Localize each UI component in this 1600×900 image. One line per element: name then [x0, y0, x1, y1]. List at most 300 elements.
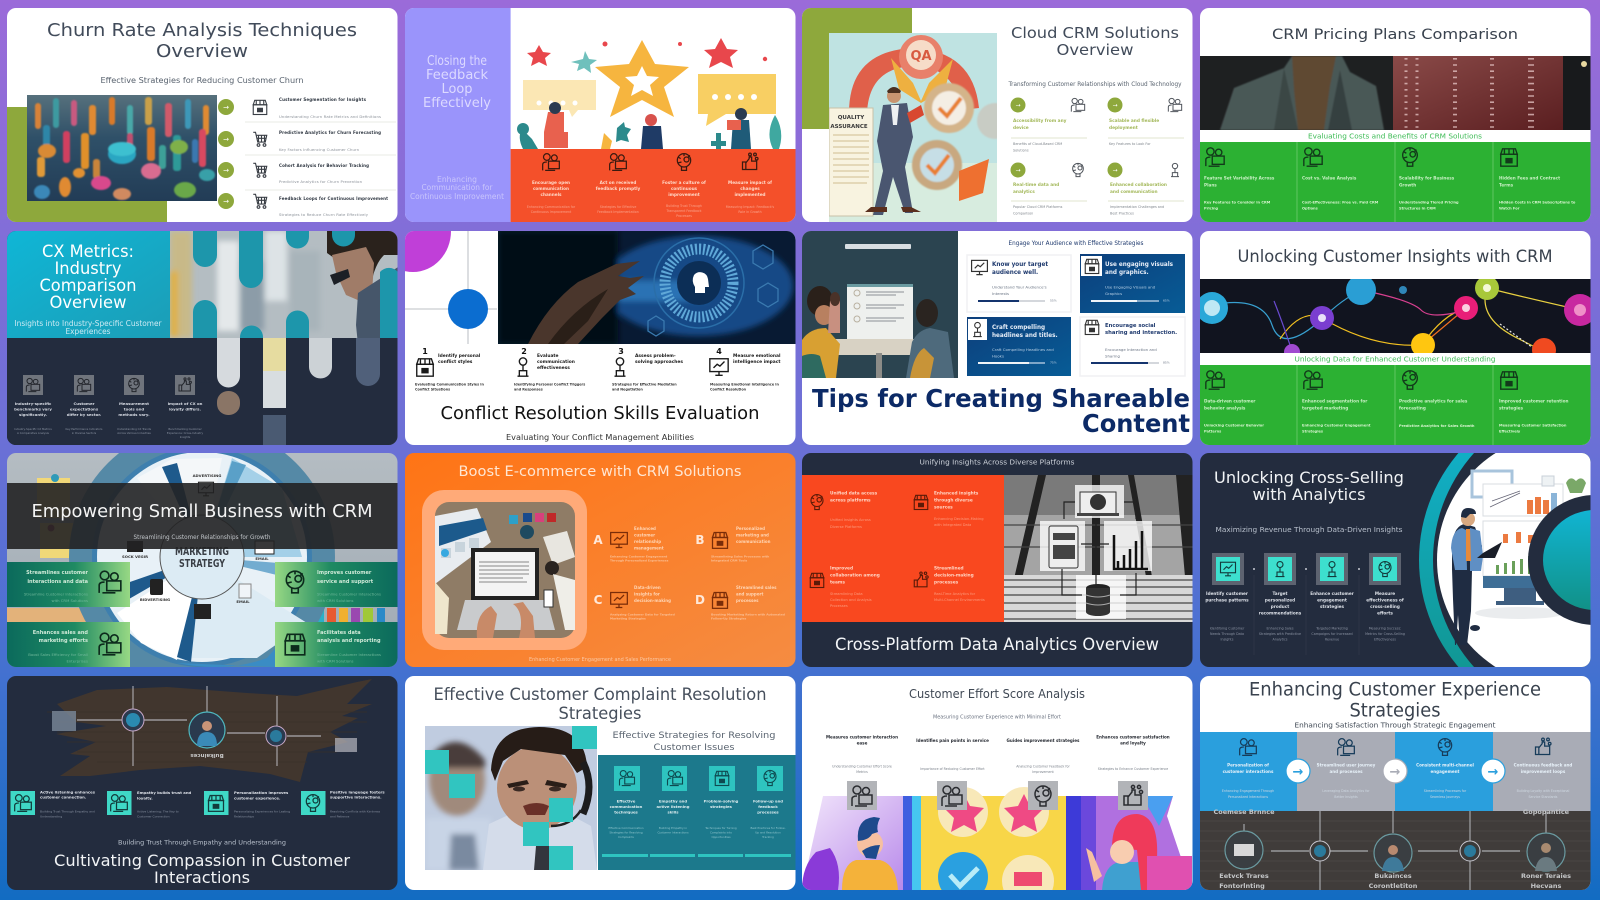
illustration: characters and stars — [802, 787, 1192, 900]
four insight items: across platforms — [830, 498, 871, 504]
title: Enhancing Customer Experience — [1249, 680, 1541, 700]
panel heading: Customer Issues — [654, 743, 735, 753]
card: Unlocking Customer Insights — [1196, 231, 1596, 445]
card: Cross-Platform Data Analytics — [802, 453, 1193, 667]
title: Effective Customer Complaint Resolution — [434, 685, 766, 705]
green accent block — [7, 107, 167, 222]
four action columns — [527, 153, 775, 218]
four insight items: sources — [934, 504, 953, 510]
card: Conflict Resolution — [405, 231, 796, 445]
four evaluation steps: 1 — [422, 347, 428, 356]
metric columns: in Diverse Sectors — [72, 431, 97, 435]
title: Strategies — [1350, 700, 1440, 722]
four insight items: through diverse — [934, 498, 973, 504]
four compassion items: Relationships — [234, 814, 254, 818]
benefit tile: top right: service and support — [317, 579, 374, 585]
title: Overview — [50, 293, 127, 313]
four evaluation steps: communication — [537, 359, 575, 365]
teal strategies panel: Best Practices for Follow- — [750, 826, 786, 830]
four insight items: processes — [934, 580, 959, 586]
marketing strategy wheel: EMAIL — [255, 556, 269, 561]
service items A to D: B — [695, 533, 705, 547]
metric columns: Understanding CX Trends — [117, 427, 152, 431]
metric columns: Industry-specific — [15, 401, 52, 406]
teal strategies panel: techniques — [614, 810, 639, 814]
benefit tile: top left: Streamlines customer — [26, 570, 89, 576]
title: Interactions — [154, 868, 250, 887]
four action columns: product — [1271, 604, 1289, 609]
photo: network of people: Eetvck Trares — [1219, 872, 1269, 880]
four evaluation steps: Identifying Personal Conflict Triggers — [514, 382, 585, 386]
card: Cultivating Compassion — [7, 676, 398, 890]
photo: coloured data pegs — [27, 95, 217, 201]
four step band: → — [1488, 765, 1499, 780]
metric columns: Benchmarking Customer — [168, 427, 203, 431]
service items A to D: communication — [736, 539, 771, 544]
four benefit items: Enhanced collaboration — [1110, 182, 1167, 188]
four insight items: decision-making — [934, 572, 974, 578]
four insight items: Unified Insights Across — [830, 518, 871, 522]
title: Content — [1082, 409, 1190, 438]
teal strategies panel — [598, 755, 796, 870]
four step band: Better Insights — [1334, 795, 1358, 799]
green column band: Feature Set Variability Across — [1204, 176, 1275, 180]
card: Effective Complaint Resolution — [405, 676, 796, 890]
title: Cross-Platform Data Analytics Overview — [835, 635, 1159, 654]
four insight items: Processes — [830, 604, 848, 608]
photo: hand and digital head — [498, 231, 796, 344]
side title: Effectively — [423, 95, 491, 111]
orange panel — [802, 475, 1004, 622]
metric columns: differ by sector. — [67, 412, 102, 417]
tip cards: Craft Compelling Headlines and — [992, 347, 1054, 352]
metric columns: Insights — [180, 435, 191, 439]
tip cards: Graphics — [1105, 291, 1122, 296]
four benefit items: Key Features to Look For — [1109, 142, 1151, 146]
four insight items: Streamlining Data — [830, 592, 863, 596]
green column band: Growth — [1399, 182, 1416, 188]
tip cards: Craft compelling — [992, 325, 1045, 331]
four effort columns: Enhances customer satisfaction — [1096, 734, 1170, 740]
four evaluation steps: Conflict Situations — [415, 388, 450, 392]
service items A to D: insights for — [634, 592, 660, 596]
title: with Analytics — [1252, 485, 1366, 504]
four action columns: recommendations — [1259, 610, 1302, 616]
title: Strategies — [558, 704, 642, 724]
service items A to D: Data-driven — [634, 585, 661, 590]
lavender side panel — [405, 8, 511, 222]
four compassion items: loyalty. — [137, 796, 153, 800]
four benefit items: → — [1015, 167, 1021, 174]
green column band: Pricing — [1204, 206, 1219, 210]
four action columns: Foster a culture of — [662, 180, 706, 185]
four step band: Consistent multi-channel — [1416, 762, 1474, 768]
olive accent block — [802, 8, 912, 129]
teal strategies panel: active listening — [657, 804, 690, 809]
teal hanging and rising pills — [193, 231, 398, 338]
green column band: strategies — [1499, 406, 1523, 410]
green column band: Hidden Fees and Contract — [1499, 176, 1560, 180]
teal strategies panel: Techniques for Turning — [704, 826, 737, 830]
benefit tile: top right: Streamline Customer Interactions — [317, 592, 381, 596]
teal strategies panel: strategies — [710, 804, 733, 809]
four effort columns: Analyzing Customer Feedback for — [1016, 764, 1070, 768]
metric columns: Customer — [73, 401, 95, 406]
photo: data architecture diagram — [1004, 475, 1192, 622]
four effort columns: Metrics — [856, 770, 868, 774]
illustration: quality assurance: QUALITY — [838, 115, 865, 121]
teal strategies panel: Opportunities — [711, 835, 731, 839]
metric columns: Across Various Industries — [117, 431, 151, 435]
four compassion items: Active listening enhances — [40, 790, 96, 794]
list of four techniques: Feedback Loops for Continuous Improvement — [279, 196, 388, 201]
green column band: behavior analysis — [1204, 406, 1246, 410]
green column band: Measuring Customer Satisfaction — [1499, 424, 1567, 428]
illustration: analyst with charts — [1451, 471, 1586, 645]
four action columns: Effectiveness — [1374, 638, 1396, 642]
four compassion items: Personalizing Experiences for Lasting — [234, 810, 290, 814]
side subtitle — [410, 175, 504, 201]
four compassion items: Active Listening: The Key to — [137, 810, 179, 814]
side title — [423, 53, 491, 111]
four insight items: teams — [830, 580, 845, 586]
list of four techniques: Predictive Analytics for Churn Prevention — [279, 179, 363, 184]
green column band: forecasting — [1399, 406, 1426, 410]
four evaluation steps: Measure emotional — [733, 353, 781, 359]
teal strategies panel: Complaints into — [710, 830, 732, 834]
side title: Loop — [442, 81, 472, 97]
side subtitle: Continuous Improvement — [410, 192, 504, 201]
four compassion items: Customer Connection — [137, 814, 170, 818]
four insight items: Diverse Platforms — [830, 525, 862, 529]
card: Unlocking Cross-Selling — [1200, 395, 1600, 725]
title: Industry — [54, 259, 122, 279]
four compassion items: Understanding — [40, 814, 62, 818]
photo: network of people: Fontorlnting — [1219, 882, 1265, 890]
green column band — [1200, 142, 1590, 222]
four benefit items: Scalable and flexible — [1109, 118, 1159, 124]
four evaluation steps: intelligence impact — [733, 359, 780, 365]
four benefit items — [1010, 98, 1184, 216]
four action columns: Processes — [676, 214, 692, 218]
card: Closing the Feedback Loop — [405, 8, 796, 222]
four action columns: Enhancing Sales — [1266, 626, 1294, 630]
four benefit items: Popular Cloud CRM Platforms — [1013, 205, 1063, 209]
title: Cultivating Compassion in Customer — [54, 851, 350, 870]
panel heading — [612, 731, 776, 753]
four insight items: with Integrated Data — [934, 523, 971, 527]
metric columns — [14, 375, 203, 439]
side subtitle: Communication for — [422, 183, 493, 192]
four action columns: strategies — [1320, 604, 1344, 609]
four step band: Personalized Interactions — [1228, 795, 1268, 799]
four benefit items: → — [1112, 167, 1118, 174]
four step band: Streamlined user journey — [1317, 762, 1376, 768]
green column band: Data-driven customer — [1204, 398, 1256, 404]
title — [1214, 468, 1404, 504]
subtitle: Experiences — [66, 327, 111, 336]
four action columns: Insights — [1221, 638, 1234, 642]
four compassion items: Personalization improves — [234, 790, 289, 795]
marketing strategy wheel: SOCK VEGIR — [122, 554, 148, 559]
card: Churn Rate Analysis — [7, 8, 398, 222]
list of four techniques: → — [223, 104, 229, 112]
photo: network of people: Hecvans — [1531, 882, 1562, 890]
list of four techniques — [218, 97, 396, 217]
four action columns: Campaigns for Increased — [1311, 632, 1353, 636]
four action columns: Target — [1272, 591, 1288, 596]
benefit tile: bottom right — [275, 622, 398, 667]
four action columns: Act on received — [600, 180, 636, 185]
teal strategies panel: Strategies for Resolving — [609, 830, 643, 834]
four compassion items: Resolving Conflicts with Kindness — [330, 810, 381, 814]
photo frame — [422, 490, 587, 650]
four step band: and processes — [1329, 769, 1363, 774]
illustration: data network — [1200, 279, 1590, 353]
four insight items — [810, 490, 985, 608]
dark pill extensions — [193, 338, 217, 383]
subtitle: Building Trust Through Empathy and Understanding — [118, 838, 286, 846]
benefit tile: top right: Improves customer — [317, 570, 372, 576]
four insight items: Real-Time Analytics for — [934, 592, 976, 596]
four benefit items: device — [1013, 125, 1029, 131]
green column band: Unlocking Customer Behavior — [1204, 424, 1264, 428]
subtitle: Insights into Industry-Specific Customer — [14, 319, 162, 328]
list of four techniques: Cohort Analysis for Behavior Tracking — [279, 163, 369, 168]
four evaluation steps: Assess problem- — [635, 353, 676, 359]
four evaluation steps — [415, 347, 781, 392]
service items A to D: Personalized — [736, 526, 765, 531]
dark title band — [7, 483, 398, 549]
marketing strategy wheel: STRATEGY — [179, 557, 226, 570]
small photo pill — [217, 391, 240, 415]
photo: network of people: Roner Teraies — [1521, 872, 1571, 880]
teal and white arcs — [1419, 395, 1600, 725]
footer subtitle: Enhancing Customer Engagement and Sales Performance — [529, 657, 672, 663]
four compassion items — [10, 790, 385, 818]
tip cards: and graphics. — [1105, 270, 1149, 276]
tip cards: headlines and titles. — [992, 333, 1058, 339]
title — [54, 851, 350, 887]
service items A to D: processes — [736, 598, 759, 603]
benefit tile: bottom right: Facilitates data — [317, 630, 361, 636]
four insight items: Multi-Channel Environments — [934, 598, 985, 602]
service items A to D: Analyzing Customer Data for Targeted — [610, 612, 675, 616]
photo: laptop on desk — [435, 502, 575, 638]
four benefit items: → — [1015, 102, 1021, 109]
four action columns: efforts — [1377, 610, 1393, 616]
metric columns: Measurement — [119, 401, 149, 406]
list of four techniques: Understanding Churn Rate Metrics and Definitions — [279, 114, 381, 119]
four benefit items: and communication — [1110, 189, 1158, 195]
tip cards: Hooks — [992, 354, 1004, 358]
metric columns: Key Performance Indicators — [66, 427, 103, 431]
photo: network of people: Corontletiton — [1369, 882, 1418, 890]
four action columns: Measuring Impact: Feedback's — [726, 205, 775, 209]
tip cards: sharing and interaction. — [1105, 330, 1177, 336]
four evaluation steps: effectiveness — [537, 365, 570, 371]
four benefit items: deployment — [1109, 125, 1138, 131]
service items A to D: Boosting Marketing Return with Automated — [711, 612, 785, 616]
teal strategies panel: Effective — [617, 798, 636, 804]
title — [1012, 26, 1178, 55]
marketing strategy wheel: MARKETING — [175, 545, 229, 558]
list of four techniques: Strategies to Reduce Churn Rate Effectively — [279, 212, 369, 217]
brush-stroke photo with network: Bulkainces — [190, 752, 224, 758]
green column band: Options — [1302, 206, 1318, 210]
four insight items: Unified data access — [830, 490, 878, 496]
four action columns: Identify customer — [1206, 591, 1249, 596]
card: Customer Effort Score — [802, 676, 1192, 900]
marketing strategy wheel: ADVERTISING — [193, 473, 221, 478]
metric columns: loyalty differs. — [169, 406, 201, 412]
service items A to D: Follow-Up Strategies — [711, 616, 747, 620]
benefit tile: bottom right: analysis and reporting — [317, 638, 381, 644]
green column band — [1200, 365, 1590, 445]
tip cards: Encourage social — [1105, 323, 1156, 329]
tip cards: Use engaging visuals — [1105, 262, 1174, 268]
benefit tile: top left: Streamline Customer Interactions — [24, 592, 88, 596]
four benefit items: Best Practices — [1110, 212, 1134, 216]
panel heading: Effective Strategies for Resolving — [612, 731, 776, 741]
four effort columns: Understanding Customer Effort Score — [832, 764, 892, 768]
photo: network of people — [1200, 808, 1591, 890]
service items A to D: Marketing Strategies — [610, 616, 646, 620]
green column band: Structures in CRM — [1399, 206, 1436, 210]
subtitle — [14, 319, 162, 336]
tip cards: 85% — [1163, 360, 1170, 364]
list of four techniques: Key Factors Influencing Customer Churn — [279, 147, 360, 152]
benefit tile: bottom right: Streamline Customer Interactions — [317, 652, 381, 657]
four action columns: channels — [540, 192, 562, 197]
teal strategies panel: communication — [610, 804, 643, 809]
side title: Feedback — [426, 67, 488, 83]
teal strategies panel: Follow-up and — [753, 798, 783, 804]
four benefit items: Comparison — [1013, 212, 1033, 216]
green column band: Effectively — [1499, 430, 1521, 434]
metric columns: benchmarks vary — [14, 406, 52, 412]
benefit tile: bottom left: Enhances sales and — [33, 630, 88, 636]
tip cards — [967, 254, 1185, 376]
four compassion items: customer experience. — [234, 796, 281, 800]
title: CX Metrics: — [42, 242, 134, 262]
title: Comparison — [40, 276, 136, 296]
benefit tile: top left: with CRM Solutions — [52, 598, 88, 603]
green column band: Scalability for Business — [1399, 176, 1455, 180]
list of four techniques: → — [223, 136, 229, 144]
four effort columns: and loyalty — [1120, 740, 1146, 746]
orange action band — [511, 149, 796, 222]
dark lower panel with photo windows — [7, 338, 398, 445]
four step band: Enhancing Engagement Through — [1222, 789, 1274, 793]
subtitle: Measuring Customer Experience with Minimal Effort — [933, 714, 1061, 720]
sticky notes backdrop — [7, 474, 385, 624]
green column band: Cost vs. Value Analysis — [1302, 176, 1357, 180]
four compassion items: customer connection. — [40, 794, 87, 800]
four action columns: cross-selling — [1370, 604, 1400, 609]
four benefit items: Real-time data and — [1013, 182, 1059, 188]
service items A to D: and support — [736, 592, 763, 596]
four action columns: continuous — [671, 186, 698, 191]
service items A to D: Enhancing Customer Engagement — [610, 554, 668, 558]
card: Cloud CRM Solutions — [802, 8, 1192, 222]
title: Conflict Resolution Skills Evaluation — [440, 403, 760, 424]
four insight items: Collection and Analysis — [830, 598, 872, 602]
teal strategies panel: Empathy and — [659, 798, 687, 804]
card: CRM Pricing Plans — [1200, 8, 1591, 222]
four step band: Seamless Journeys — [1430, 795, 1460, 799]
card: Tips for Shareable Content — [802, 231, 1192, 445]
service items A to D: D — [695, 593, 705, 607]
four step band: → — [1293, 765, 1304, 780]
service items A to D: A — [593, 533, 603, 547]
title: Overview — [1056, 41, 1134, 59]
tip cards: Understand Your Audience's — [992, 284, 1047, 290]
illustration: quality assurance — [829, 33, 997, 222]
title: Churn Rate Analysis Techniques — [47, 20, 357, 41]
green column band: Key Features to Consider in CRM — [1204, 200, 1271, 204]
four action columns: Analytics — [1273, 638, 1288, 642]
four evaluation steps: Conflict Resolution — [710, 388, 747, 392]
four evaluation steps: solving approaches — [635, 359, 683, 365]
subtitle: Evaluating Your Conflict Management Abilities — [506, 433, 694, 442]
green column band: Plans — [1204, 182, 1217, 188]
green column band: Cost-Effectiveness: Free vs. Paid CRM — [1302, 200, 1379, 204]
teal strategies panel: processes — [757, 810, 779, 814]
service items A to D: Through Personalized Experiences — [610, 558, 669, 562]
subtitle: Transforming Customer Relationships with Cloud Technology — [1008, 81, 1182, 88]
photo: man before price table — [1200, 56, 1590, 130]
four evaluation steps: 4 — [716, 347, 722, 356]
title: Tips for Creating Shareable — [812, 384, 1190, 413]
benefit tile: bottom right: with CRM Solutions — [317, 658, 354, 664]
four compassion items: Empathy builds trust and — [137, 790, 192, 795]
tip cards: 75% — [1050, 360, 1057, 364]
list of four techniques: Predictive Analytics for Churn Forecasting — [279, 130, 381, 135]
four action columns: Revenue — [1325, 638, 1339, 642]
subtitle: Engage Your Audience with Effective Strategies — [1008, 240, 1144, 247]
four effort columns: Strategies to Enhance Customer Experience — [1098, 767, 1168, 771]
tip cards: audience well. — [992, 270, 1038, 276]
metric columns: Industry-Specific CX Metrics — [14, 427, 52, 431]
four evaluation steps: Evaluating Communication Styles in — [415, 382, 484, 386]
green column band: Watch For — [1499, 206, 1520, 210]
four evaluation steps: Evaluate — [537, 353, 559, 359]
four action columns: implemented — [734, 192, 766, 197]
four action columns: Metrics for Cross-Selling — [1365, 632, 1405, 636]
photo: network of people: Gopopantice — [1523, 808, 1570, 816]
four action columns: feedback promptly — [596, 186, 641, 191]
benefit tile: bottom left — [7, 622, 130, 667]
four action columns: Strategies with Predictive — [1259, 632, 1301, 636]
title: Cloud CRM Solutions — [1011, 24, 1179, 42]
green column band: Enhancing Customer Engagement — [1302, 424, 1371, 428]
four action columns: Continuous Improvement — [531, 210, 572, 214]
service items A to D: marketing and — [736, 532, 769, 538]
four evaluation steps: Measuring Emotional Intelligence in — [710, 382, 779, 386]
four step band: Continuous feedback and — [1514, 762, 1572, 768]
four evaluation steps: Identify personal — [438, 353, 481, 359]
title: CRM Pricing Plans Comparison — [1272, 27, 1518, 43]
side title: Closing the — [427, 53, 487, 69]
four action columns: Targeted Marketing — [1315, 626, 1348, 630]
four action columns: effectiveness of — [1366, 598, 1404, 602]
four action columns: Measure — [1375, 591, 1395, 596]
benefit tile: top left — [7, 562, 130, 607]
title: Boost E-commerce with CRM Solutions — [458, 464, 742, 480]
benefit tile: top right — [275, 562, 398, 607]
teal strategies panel: Tracking — [761, 835, 774, 839]
